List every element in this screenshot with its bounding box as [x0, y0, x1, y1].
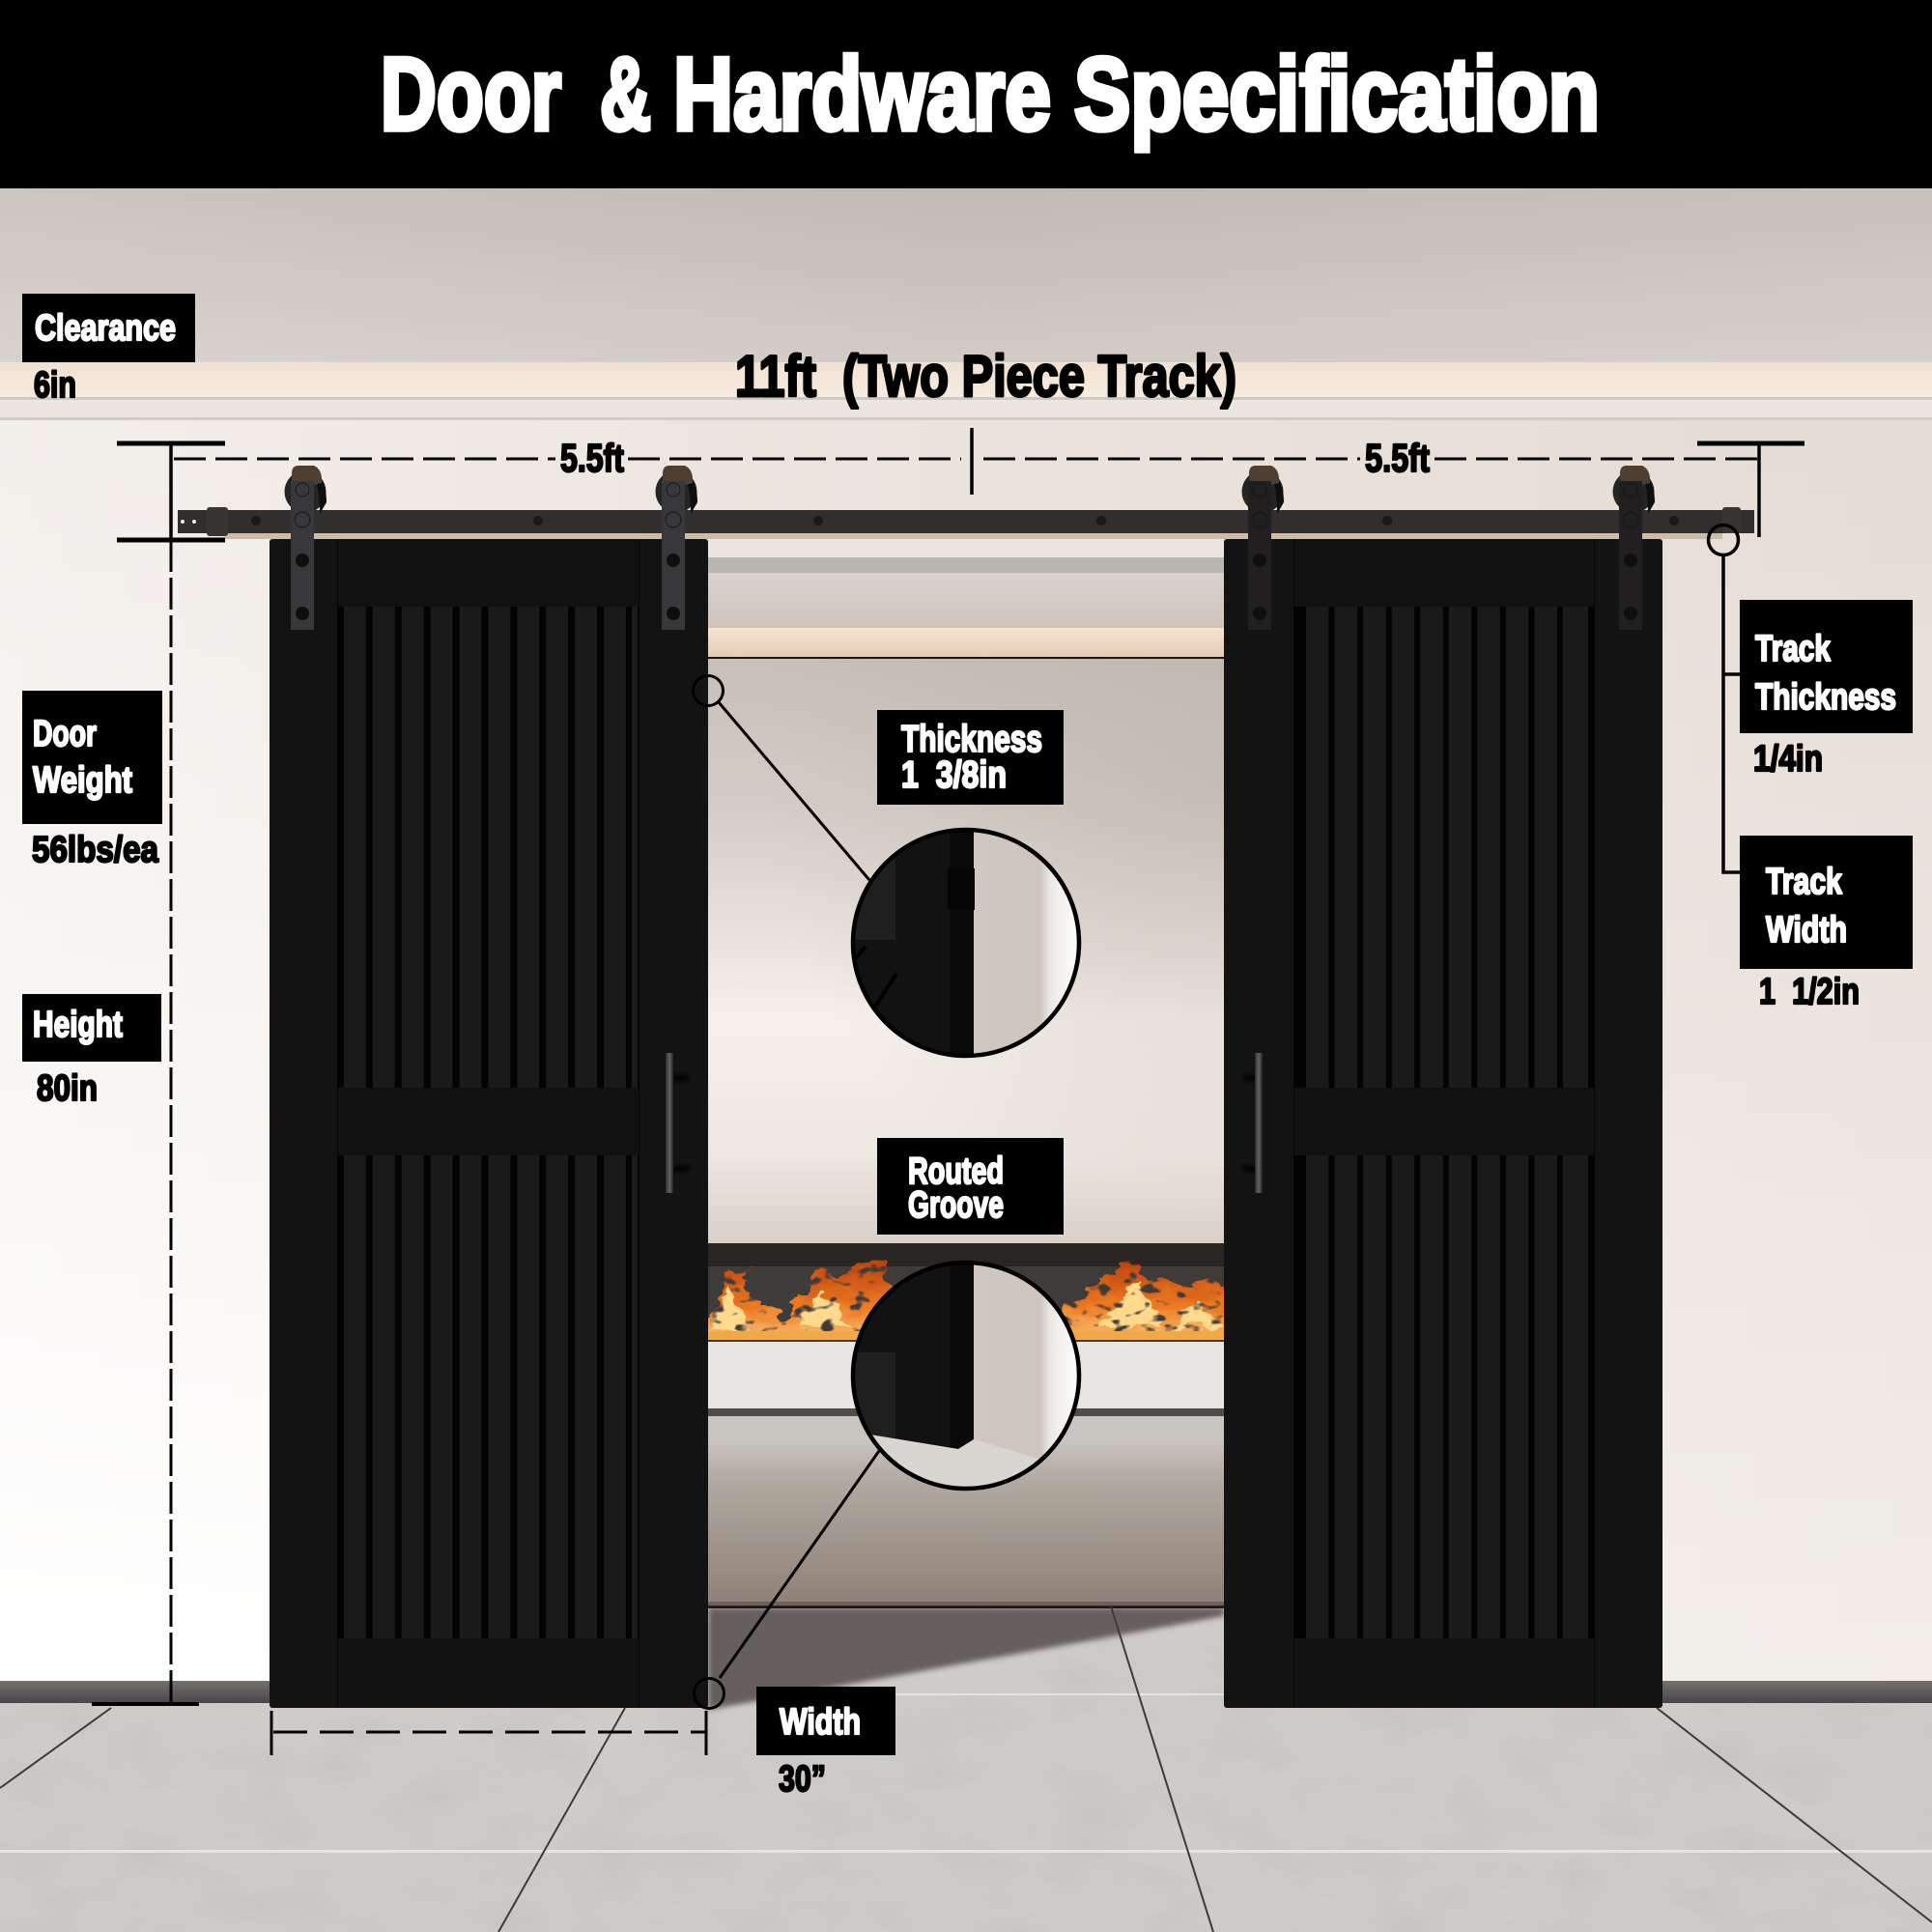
right door handle — [1243, 1053, 1263, 1193]
track callout connector — [1708, 526, 1740, 872]
track width label: 1 1/2in — [1759, 972, 1860, 1012]
height dimension line — [92, 540, 199, 1704]
door weight label: Weight — [33, 760, 132, 801]
track dimension lines — [117, 428, 1804, 540]
track thickness label: Thickness — [1755, 677, 1896, 718]
height label — [22, 994, 161, 1109]
right barn door — [1224, 539, 1662, 1708]
thickness label — [877, 710, 1064, 805]
door weight label: Door — [33, 714, 97, 754]
title — [381, 36, 1600, 152]
track thickness label — [1740, 600, 1913, 780]
routed groove label: Groove — [908, 1184, 1004, 1226]
width label: Width — [780, 1702, 861, 1743]
magnifier: door thickness detail — [852, 830, 1080, 1057]
title: Hardware — [673, 36, 1051, 152]
door weight label — [22, 691, 162, 870]
track thickness label: Track — [1755, 629, 1832, 669]
track length heading: 11ft (Two Piece Track) — [735, 344, 1236, 409]
ceiling and wall background — [0, 188, 1932, 1686]
track width label: Track — [1766, 862, 1843, 902]
left 5.5ft label: 5.5ft — [560, 436, 624, 480]
clearance label — [22, 294, 195, 406]
groove callout connector — [694, 1451, 879, 1708]
routed groove label — [877, 1138, 1064, 1235]
title: Door — [381, 36, 561, 152]
door weight label: 56lbs/ea — [32, 830, 159, 870]
width label — [756, 1687, 895, 1800]
fireplace flames — [708, 1260, 1224, 1340]
height label: Height — [33, 1005, 123, 1045]
thickness callout connector — [694, 676, 869, 880]
track width label — [1740, 836, 1913, 1012]
routed groove label: Routed — [908, 1151, 1004, 1192]
track thickness label: 1/4in — [1753, 739, 1823, 780]
header bar — [0, 0, 1932, 188]
right 5.5ft label: 5.5ft — [1365, 436, 1430, 480]
thickness label: 1 3/8in — [901, 754, 1007, 796]
floor — [0, 1606, 1932, 1932]
clearance label: 6in — [34, 365, 76, 406]
width label: 30” — [779, 1759, 826, 1800]
sliding track and hangers — [178, 466, 1754, 630]
floor tile joints — [0, 1606, 1932, 1932]
title: & — [600, 36, 651, 152]
room seen through the doorway — [696, 539, 1236, 1710]
track width label: Width — [1766, 910, 1847, 951]
magnifier: routed groove detail — [852, 1262, 1080, 1489]
title: Specification — [1074, 36, 1600, 152]
clearance label: Clearance — [35, 308, 176, 349]
thickness label: Thickness — [901, 719, 1042, 760]
width dimension line — [271, 1711, 706, 1755]
left barn door — [270, 539, 708, 1708]
left door handle — [666, 1053, 689, 1193]
height label: 80in — [37, 1068, 98, 1109]
